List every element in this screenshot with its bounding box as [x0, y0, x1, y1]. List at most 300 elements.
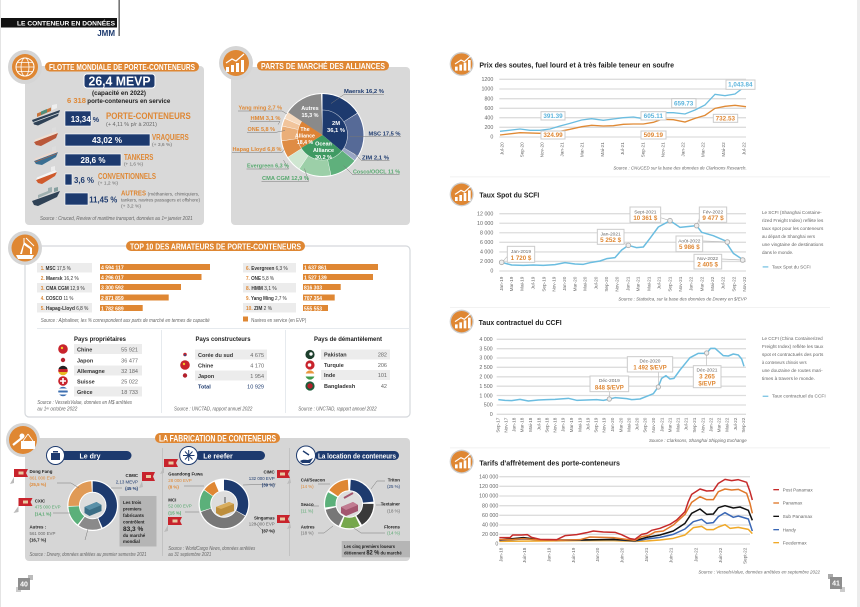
ranking: right column: 8. HMM 3,1 %: [246, 286, 277, 292]
data labels: Sept-2021: [634, 209, 657, 215]
title: Taux contractuel du CCFI: [479, 318, 562, 327]
labels: le reefer: CIMC: [263, 470, 276, 475]
data labels: Déc-2020: [640, 359, 661, 365]
ranking: left column: 3. CMA CGM 12,9 %: [41, 286, 85, 292]
line chart: 4 000: [479, 337, 493, 343]
table: pays constructeurs: Total: [198, 384, 211, 390]
bar: conventionnels: 3,6 %: [74, 176, 94, 185]
bar: vraquiers: 43,02 %: [92, 136, 122, 145]
legend: [773, 487, 813, 546]
legend: Feedermax: [783, 540, 807, 546]
labels: la location: Florens: [384, 524, 401, 529]
labels: la location: Triton: [388, 477, 400, 482]
data labels: Fév-2022: [703, 209, 724, 215]
data labels: Jan-2019: [511, 249, 531, 255]
chart section: taux spot du SCFI: [450, 182, 824, 303]
line chart: Mar-21: [636, 276, 641, 291]
line chart: 1200: [481, 77, 493, 83]
data labels: 3 265: [699, 374, 715, 381]
line chart: 0: [490, 269, 493, 275]
line chart: Jan-21: [626, 276, 631, 291]
icon: growth chart: [219, 46, 253, 80]
data labels: 605.11: [644, 113, 663, 120]
line chart: Mar-19: [509, 276, 514, 291]
callout: trois premiers: Les trois: [123, 500, 142, 505]
data labels: $/EVP: [698, 380, 716, 387]
section header: la location: La location de conteneurs: [318, 454, 396, 460]
line chart: Nov-19: [602, 417, 607, 433]
sources: Source : VesselsValue, données en M$ arrêtées: [37, 400, 132, 406]
ranking: right column: 1 527 139: [304, 275, 327, 281]
section: le dry: [10, 446, 156, 558]
line chart: [481, 77, 755, 157]
table: pays propriétaires: Grèce: [77, 390, 93, 396]
bar: vraquiers: VRAQUIERS: [152, 133, 189, 142]
table: pays propriétaires: 32 184: [121, 369, 138, 375]
line chart: Nov-20: [539, 142, 544, 157]
callout: cinq premiers loueurs: détiennent 82 % du marché: [344, 550, 402, 556]
line chart: Nov-20: [651, 417, 656, 433]
table: pays de démantèlement: [305, 336, 390, 391]
bar: autres: AUTRES: [121, 189, 146, 198]
line chart: Nov-21: [700, 417, 705, 433]
line chart: 0: [490, 412, 493, 418]
sources: [37, 400, 377, 413]
legend: Sub Panamax: [783, 514, 813, 520]
source: Source : VesselsValue, données arrêtées en septembre 2022: [698, 569, 820, 575]
explanatory text: spot et contractuels des ports: [762, 352, 824, 358]
sources: au 1ᵉʳ octobre 2022: [37, 407, 78, 413]
panel: fabrication de conteneurs: [6, 423, 410, 561]
labels: le dry: Dong Fang: [30, 469, 53, 474]
table: pays de démantèlement: Bangladesh: [324, 384, 356, 390]
bar: conventionnels: (+ 1,2 %): [98, 180, 119, 186]
line chart: Mai-20: [626, 417, 631, 432]
data labels: [590, 357, 721, 392]
line chart: Juin-19: [571, 547, 576, 563]
line chart: Jul-21: [657, 276, 662, 289]
donut chart: alliances: The: [300, 127, 310, 133]
labels: le dry: (25,5 %): [30, 482, 47, 487]
page number 41: [828, 574, 845, 592]
labels: le reefer: (39 %): [262, 483, 275, 488]
line chart: Jul-22: [721, 276, 726, 289]
line chart: Sep-19: [541, 276, 546, 292]
legend: [763, 264, 811, 270]
table: pays de démantèlement: 42: [381, 384, 387, 390]
labels: le reefer: 126 000 EVP: [249, 522, 275, 527]
line chart: Jul-19: [530, 276, 535, 289]
heading: flotte mondiale: FLOTTE MONDIALE DE PORTE-CONTENEURS: [49, 62, 195, 72]
icon: globe: [8, 50, 42, 84]
line chart: 140 000: [479, 474, 498, 480]
panel: parts de marché: [219, 46, 410, 225]
bar: porte-conteneurs: PORTE-CONTENEURS: [106, 111, 191, 122]
labels: le dry: Autres :: [30, 524, 47, 530]
line chart: Mai-22: [721, 142, 726, 157]
page number 40: [16, 575, 33, 592]
callout labels: alliances: CMA CGM 12,9 %: [262, 176, 309, 182]
data labels: 10 361 $: [633, 215, 658, 222]
line chart: Sep-21: [667, 276, 672, 292]
bar: tankers: [65, 153, 154, 167]
bar: porte-conteneurs: (+ 4,11 % p/r à 2021): [106, 122, 157, 128]
source and legend: Source : Alphaliner, les % correspondent aux parts de marché en termes de capacité: [41, 318, 210, 324]
explanatory text: rized Freight Index) reflète les: [762, 218, 824, 224]
line chart: Sep-21: [692, 417, 697, 433]
line chart: 12 000: [477, 211, 493, 217]
line chart: Sep-18: [544, 417, 549, 433]
labels: le reefer: MCI: [168, 497, 176, 502]
data labels: Août-2022: [678, 238, 701, 244]
data labels: 5 252 $: [600, 237, 621, 244]
line chart: Nov-17: [503, 417, 508, 433]
explanatory text: une douzaine de routes mari-: [762, 368, 823, 374]
data labels: 1,043.84: [728, 82, 753, 89]
line chart: Juin-18: [522, 547, 527, 563]
labels: le reefer: (8 %): [168, 484, 179, 489]
bar: autres: (+ 3,2 %): [121, 204, 142, 208]
table: pays de démantèlement: Pakistan: [324, 352, 347, 358]
labels: le reefer: Singamas: [254, 515, 275, 520]
data labels: 5 986 $: [679, 244, 700, 251]
labels: le reefer: (15 %): [168, 510, 182, 515]
line chart: 10 000: [477, 221, 493, 227]
labels: le dry: 861 000 EVP: [30, 475, 55, 480]
icon: wrench and container: [6, 423, 40, 457]
table: pays constructeurs: 1 954: [250, 374, 264, 380]
labels: le dry: 561 000 EVP: [30, 531, 55, 536]
data labels: Déc-2021: [697, 368, 718, 374]
data labels: 509.19: [644, 132, 663, 139]
labels: la location: (14 %): [301, 484, 314, 489]
data labels: 391.39: [543, 113, 563, 120]
line chart: 80 000: [482, 503, 498, 509]
ranking: left column: 4 594 117: [101, 265, 124, 271]
explanatory text: [762, 336, 824, 382]
icon: growth chart: [450, 450, 474, 474]
data labels: [507, 207, 727, 269]
line chart: Mai-19: [519, 276, 524, 291]
line chart: Mar-18: [520, 417, 525, 432]
line chart: 600: [484, 106, 493, 112]
line chart: Jul-22: [733, 417, 738, 430]
ranking: left column: [37, 263, 210, 312]
line chart: Jan-21: [560, 142, 565, 157]
page number 41: 41: [832, 580, 840, 588]
explanatory text: une vingtaine de destinations: [762, 242, 824, 248]
donut chart: alliances: 2M: [332, 121, 340, 127]
callout: trois premiers: mondial: [123, 539, 140, 544]
line chart: 0: [495, 542, 498, 548]
labels: le reefer: Source : WorldCargo News, données arrêtées: [168, 546, 256, 552]
source: Source : Drewry, données arrêtées au premier semestre 2021: [30, 552, 147, 558]
line chart: Nov-22: [742, 276, 747, 292]
data labels: 324.99: [543, 132, 563, 139]
data labels: 659.73: [674, 100, 694, 107]
table: pays de démantèlement: Turquie: [324, 363, 344, 369]
labels: le dry: 475 000 EVP: [35, 505, 61, 510]
section: le reefer: [160, 446, 291, 558]
callout labels: alliances: [232, 89, 401, 182]
line chart: Mai-21: [646, 276, 651, 291]
line chart: Sep-20: [643, 417, 648, 433]
table: pays propriétaires: 55 921: [121, 348, 138, 354]
line chart: 40 000: [482, 523, 498, 529]
ranking: right column: 9. Yang Ming 2,7 %: [246, 296, 287, 302]
bar: autres: (méthaniers, chimiquiers,: [148, 192, 199, 197]
data labels: Nov-2022: [697, 256, 718, 262]
line chart: 2 000: [479, 375, 493, 381]
line chart: Jan-22: [681, 142, 686, 157]
legend: Post Panamax: [783, 487, 813, 493]
table: pays propriétaires: 25 022: [121, 380, 138, 386]
line chart: 1000: [481, 87, 493, 93]
heading: parts de marché: PARTS DE MARCHÉ DES ALLIANCES: [261, 60, 385, 71]
line chart: Mai-20: [583, 276, 588, 291]
line chart: Jan-22: [693, 547, 698, 562]
section: la location: [296, 446, 410, 557]
line chart: 4 000: [480, 250, 493, 256]
ranking: right column: 10. ZIM 2 %: [246, 306, 272, 312]
line chart: 8 000: [480, 230, 493, 236]
data labels: Déc-2019: [599, 378, 620, 384]
icon: growth chart: [450, 310, 474, 334]
explanatory text: au départ de Shanghai vers: [762, 234, 816, 240]
source: Source : Cnuced, Review of maritime transport, données au 1ᵉʳ janvier 2021: [40, 216, 193, 222]
legend: Taux contractuel du CCFI: [772, 394, 826, 400]
line chart: Jan-20: [562, 276, 567, 291]
labels: le dry: (45 %): [125, 486, 139, 491]
table: pays propriétaires: 36 477: [121, 358, 138, 364]
labels: le reefer: 52 000 EVP: [168, 504, 192, 509]
line chart: Jul-21: [684, 417, 689, 430]
line chart: 500: [484, 403, 493, 409]
callout: trois premiers: [120, 496, 156, 546]
labels: la location: (25 %): [387, 484, 401, 489]
source: Source : CNUCED sur la base des données de Clarksons Research.: [613, 165, 747, 171]
table: pays propriétaires: Chine: [77, 348, 92, 354]
table: pays constructeurs: 4 675: [250, 353, 264, 359]
line chart: Nov-21: [660, 142, 665, 157]
table: pays de démantèlement: 206: [378, 363, 387, 369]
line chart: Mar-22: [701, 142, 706, 157]
ranking: right column: 707 354: [304, 296, 323, 302]
line chart: Mai-22: [725, 417, 730, 432]
callout labels: alliances: Evergreen 6,3 %: [247, 164, 289, 170]
line chart: 6 000: [480, 240, 493, 246]
line chart: Jul-22: [741, 142, 746, 155]
legend: Taux Spot du SCFI: [772, 264, 811, 270]
ranking: left column: 2 871 859: [101, 296, 124, 302]
line chart: Nov-20: [615, 276, 620, 292]
labels: la location: (14 %): [387, 531, 401, 536]
data labels: 848 $/EVP: [595, 384, 624, 391]
line chart: 20 000: [482, 532, 498, 538]
line chart: 120 000: [479, 484, 498, 490]
line chart: 100 000: [479, 494, 498, 500]
line chart: Jan-21: [644, 547, 649, 562]
ranking: left column: 3 300 592: [101, 285, 124, 291]
donut chart: alliances: Alliance: [295, 134, 315, 140]
ranking: left column: 2. Maersk 16,2 %: [41, 276, 79, 282]
bar: autres: [65, 189, 200, 208]
panel: flotte mondiale: [8, 50, 204, 225]
page header: JMM: [97, 29, 115, 38]
explanatory text: à conteneurs chinois vers: [762, 360, 807, 366]
line chart: Jan-21: [659, 417, 664, 432]
labels: le reefer: Guandong Fuwa: [168, 472, 203, 477]
donut: le dry: [67, 480, 118, 531]
callout labels: alliances: Yang ming 2,7 %: [238, 106, 282, 112]
table: pays constructeurs: Pays constructeurs: [196, 336, 251, 343]
line chart: Jul-19: [585, 417, 590, 430]
line chart: Jan-19: [546, 547, 551, 562]
bar: conventionnels: CONVENTIONNELS: [98, 172, 157, 181]
labels: la location: Autres: [301, 524, 315, 529]
table: pays de démantèlement: Pays de démantèlement: [314, 336, 383, 343]
line chart: Mar-19: [569, 417, 574, 432]
ranking: right column: 1 637 861: [304, 265, 327, 271]
line chart: 1 000: [479, 393, 493, 399]
line chart: 800: [484, 96, 493, 102]
line chart: Jul-18: [536, 417, 541, 430]
labels: le dry: (16,7 %): [30, 537, 47, 542]
icon: growth chart: [450, 182, 474, 206]
line chart: 2 000: [480, 259, 493, 265]
line chart: Jan-20: [610, 417, 615, 432]
ranking: left column: 1. MSC 17,5 %: [41, 266, 71, 272]
table: pays de démantèlement: 101: [378, 373, 387, 379]
explanatory text: taux spot pour les conteneurs: [762, 226, 824, 232]
callout: cinq premiers loueurs: Les cinq premiers loueurs: [344, 544, 396, 549]
bar: tankers: (+ 1,6 %): [124, 162, 144, 167]
table: pays constructeurs: Corée du sud: [198, 353, 233, 359]
line chart: Jan-22: [689, 276, 694, 291]
line chart: Sep-20: [519, 142, 524, 157]
labels: le dry: CIMIC: [126, 473, 139, 478]
line chart: Sep-22: [731, 276, 736, 292]
line chart: 2 500: [479, 365, 493, 371]
callout labels: alliances: MSC 17,5 %: [368, 132, 401, 138]
callout: trois premiers: premiers: [123, 506, 142, 512]
callout: trois premiers: 83,3 %: [123, 526, 143, 533]
explanatory text: times à travers le monde.: [762, 376, 815, 382]
callout labels: alliances: HMM 3,1 %: [250, 116, 281, 122]
sources: Source : UNCTAD, rapport annuel 2022: [174, 407, 252, 413]
page number 40: 40: [20, 582, 28, 588]
line chart: Sept-22: [742, 547, 747, 564]
callout labels: alliances: Cosco/OOCL 11 %: [353, 170, 400, 176]
line chart: Jul-20: [635, 417, 640, 430]
table: pays constructeurs: [180, 336, 267, 390]
labels: la location: (18 %): [301, 531, 314, 536]
bar: porte-conteneurs: 13,34: [71, 115, 91, 124]
data labels: 9 477 $: [702, 215, 724, 222]
explanatory text: Le CCFI (China Containerized: [762, 336, 823, 342]
line chart: Mai-19: [577, 417, 582, 432]
line chart: Mai-21: [676, 417, 681, 432]
data labels: 1 492 $/EVP: [633, 364, 667, 371]
icon: growth chart: [450, 52, 474, 76]
labels: le dry: [30, 469, 139, 542]
labels: la location: (11 %): [301, 508, 314, 513]
line chart: 0: [490, 135, 493, 141]
labels: la location: CAI/Seacon: [301, 478, 325, 483]
donut chart: alliances: Autres: [301, 106, 319, 112]
source and legend: [41, 316, 307, 324]
data labels: 732.53: [716, 115, 735, 122]
labels: la location: Seaco: [301, 502, 314, 507]
chart section: taux contractuel du CCFI: [450, 310, 826, 444]
sources: Source : UNCTAD, rapport annuel 2022: [298, 407, 377, 413]
line chart: [479, 474, 752, 564]
chart section: tarifs d'affrètement: [450, 450, 820, 575]
panel: top 10 armateurs: [8, 231, 410, 417]
line chart: Mar-22: [717, 417, 722, 432]
bar: conventionnels: [65, 172, 157, 186]
line chart: Sep-20: [604, 276, 609, 292]
page header: LE CONTENEUR EN DONNÉES: [17, 18, 116, 28]
bar: vraquiers: (+ 3,6 %): [152, 142, 173, 147]
line chart: Jan-19: [499, 276, 504, 291]
ranking: left column: 4. COSCO 11 %: [41, 296, 73, 302]
labels: le reefer: au 31 septembre 2021: [168, 552, 211, 558]
callout: trois premiers: contrôlent: [123, 520, 145, 524]
donut chart: alliances: [280, 93, 364, 177]
icon: crane: [8, 231, 42, 265]
labels: le dry: (14,1 %): [35, 511, 52, 516]
table: pays de démantèlement: 282: [378, 352, 387, 358]
data labels: [541, 80, 755, 139]
callout labels: alliances: ZIM 2,1 %: [362, 156, 389, 162]
line chart: Sep-22: [741, 417, 746, 433]
chart section: prix des soutes: [450, 52, 755, 171]
total capacity: (capacité en 2022): [92, 91, 146, 97]
labels: le reefer: 132 000 EVP: [249, 476, 275, 481]
source: Source : Clarksons, Shanghai Shipping Exchange: [649, 438, 747, 444]
line chart: Jan-22: [708, 417, 713, 432]
donut chart: alliances: Alliance: [313, 148, 334, 154]
section header: le dry: [46, 446, 132, 464]
explanatory text: dans le monde.: [762, 250, 793, 256]
donut chart: alliances: 30,2 %: [315, 155, 332, 161]
heading: top 10: TOP 10 DES ARMATEURS DE PORTE-CONTENEURS: [130, 242, 301, 252]
flags: [10, 469, 155, 513]
line chart: Juin-21: [669, 547, 674, 563]
ranking: right column: [243, 263, 378, 312]
line chart: Mai-18: [528, 417, 533, 432]
icons: ships: [32, 104, 60, 206]
ranking: left column: 4 296 017: [101, 275, 124, 281]
line chart: Jan-18: [498, 547, 503, 562]
line chart: 3 000: [479, 356, 493, 362]
donut chart: alliances: 15,3 %: [301, 113, 319, 119]
table: pays propriétaires: Pays propriétaires: [74, 336, 126, 343]
table: pays constructeurs: 10 929: [247, 384, 264, 390]
callout labels: alliances: ONE 5,8 %: [248, 127, 275, 133]
line chart: Mar-20: [618, 417, 623, 432]
donut: le reefer: [198, 478, 250, 530]
labels: le reefer: (37 %): [262, 528, 275, 533]
table: pays constructeurs: Japon: [198, 374, 215, 380]
line chart: Sep-21: [640, 142, 645, 157]
table: pays de démantèlement: Inde: [324, 373, 335, 379]
bar: porte-conteneurs: [65, 111, 191, 128]
title: Prix des soutes, fuel lourd et à très faible teneur en soufre: [479, 62, 674, 69]
bar: autres: tankers, navires passagers et offshore): [121, 198, 200, 202]
table: pays propriétaires: Suisse: [77, 380, 95, 386]
